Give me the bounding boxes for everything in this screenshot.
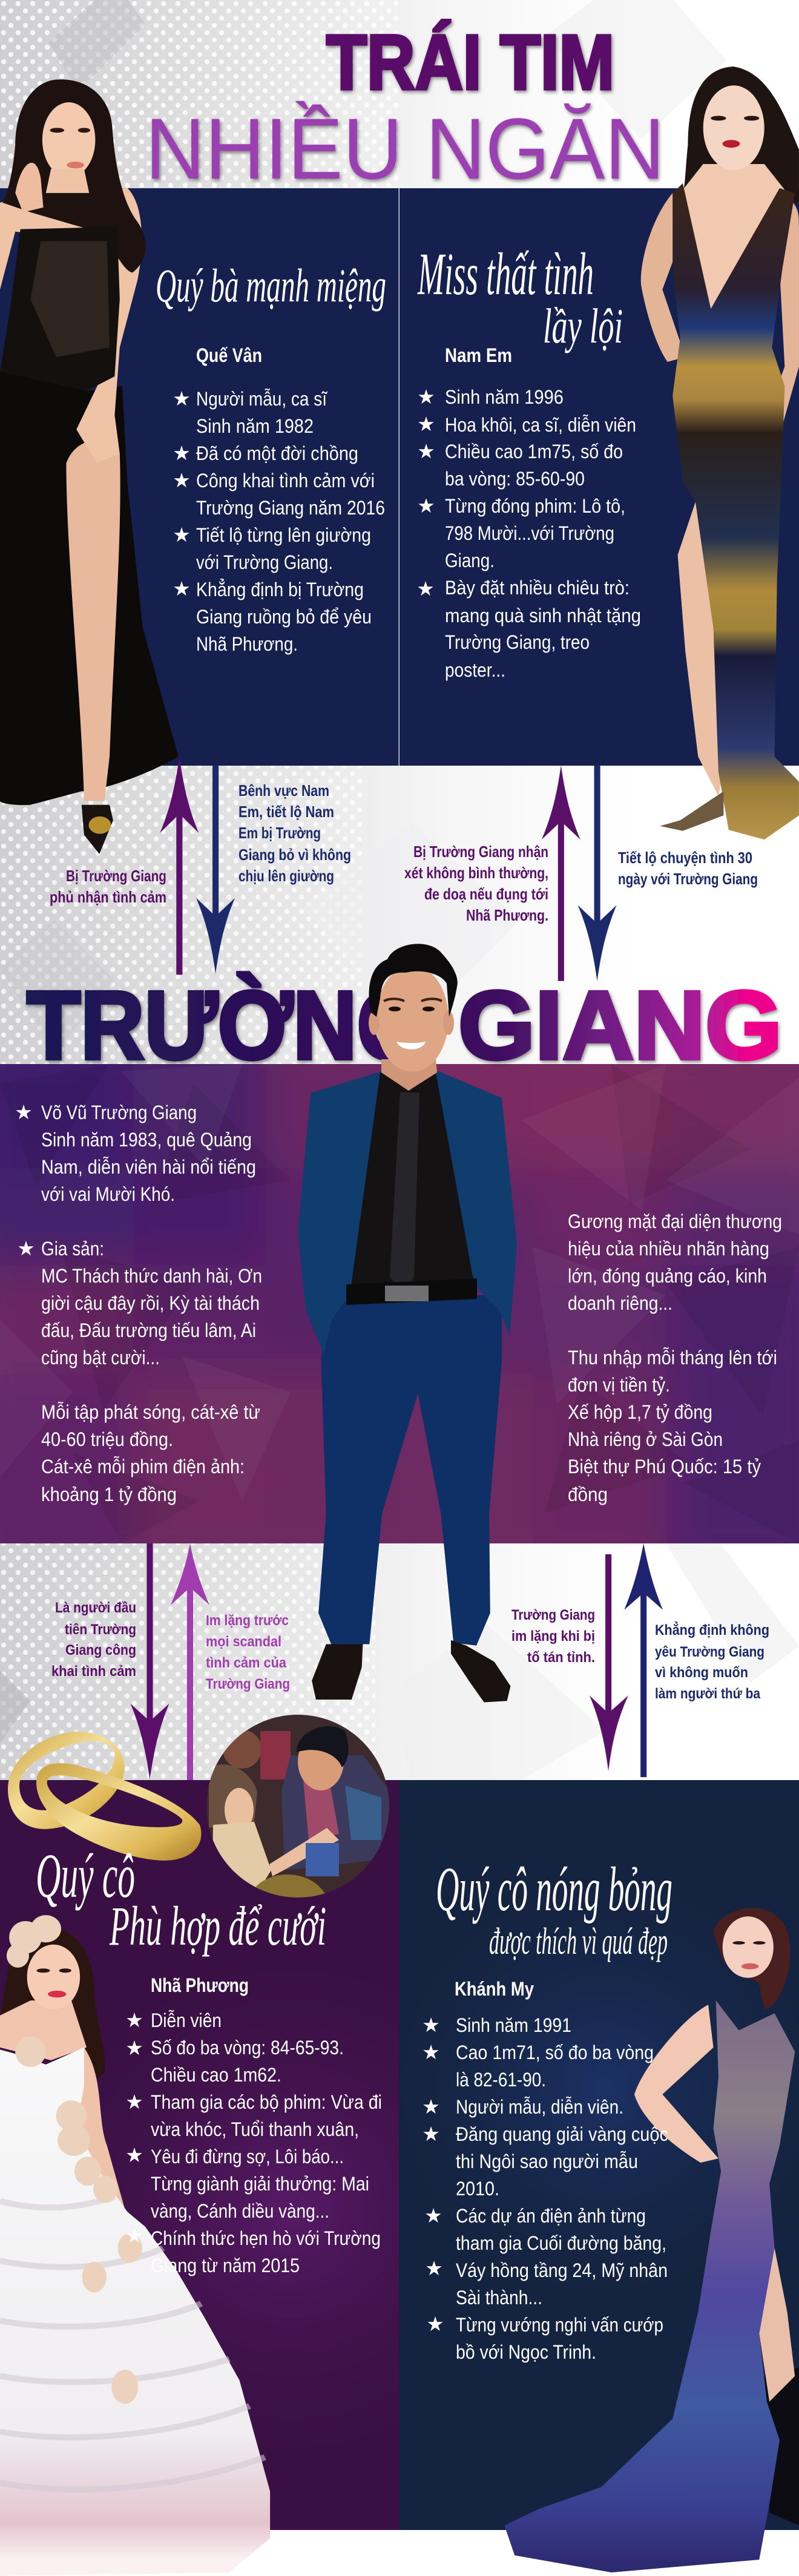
biography: đấu, Đấu trường tiếu lâm, Ai [41,1319,256,1341]
name: Nam Em [445,344,512,366]
bullet stars: ★ [424,2204,442,2227]
callout: bênh vực Nam Em: chịu lên giường [238,867,334,885]
bullet stars [173,387,191,600]
callout: nhận xét không bình thường: xét không bình thường, [404,864,548,882]
text block: Trường Giang right: Nhà riêng ở Sài Gòn [568,1428,723,1450]
callout: phủ nhận tình cảm: Bị Trường Giang [66,867,166,885]
callout: nhận xét không bình thường: Nhã Phương. [466,906,548,924]
title: Trường Giang [27,971,782,1079]
panel: Nam Em [400,188,799,766]
bullet list: 798 Mười...với Trường [445,522,614,544]
name: Quế Vân [196,344,262,366]
text block: Trường Giang right: Biệt thự Phú Quốc: 15 tỷ [568,1456,761,1477]
heading: Quý cô Phù hợp để cưới [36,1841,326,1957]
bullet list: Nhã Phương. [196,633,298,655]
bullet stars: ★ [125,2008,143,2032]
figure: Trường Giang [298,944,517,1702]
bullet list: với Trường Giang. [196,551,333,573]
bullet list: Tiết lộ từng lên giường [196,524,371,546]
bullet list: thi Ngôi sao người mẫu [456,2150,638,2172]
title [145,19,665,197]
callout: công khai tình cảm: khai tình cảm [51,1663,136,1680]
bullet list: Yêu đi đừng sợ, Lôi báo... [151,2146,344,2167]
bullet list: Chính thức hẹn hò với Trường [151,2227,381,2249]
bullet list: Giang từ năm 2015 [151,2255,300,2276]
callout: im lặng khi bị tố: im lặng khi bị [511,1628,595,1644]
callout: bênh vực Nam Em: Em, tiết lộ Nam [238,803,334,821]
callout: nhận xét không bình thường: Bị Trường Giang nhận [413,843,548,861]
bullet stars: ★ [422,2040,440,2064]
callout: im lặng trước scandal: Im lặng trước [206,1612,289,1629]
panel: Khánh My [399,1780,799,2530]
bullet list: vừa khóc, Tuổi thanh xuân, [151,2118,359,2140]
bullet stars [422,2013,444,2336]
bullet stars: ★ [426,2312,444,2336]
heading: Quý cô Phù hợp để cưới: Phù hợp để cưới [109,1895,326,1957]
bullet stars: ★ [173,577,191,600]
arrow: up to Nam Em [542,765,580,981]
icon: wedding rings [8,1732,201,1861]
bullet list [151,2009,382,2276]
biography: MC Thách thức danh hài, Ơn [41,1265,262,1287]
bullet list: Từng giành giải thưởng: Mai [151,2173,369,2195]
arrow: up from Nhã Phương [171,1543,209,1780]
bullet list [445,386,641,681]
callout: khẳng định không yêu: làm người thứ ba [655,1686,761,1702]
arrow: down from Nam Em [578,765,617,981]
biography: Võ Vũ Trường Giang [41,1102,197,1123]
bullet list: tham gia Cuối đường băng, [456,2232,666,2254]
callout: im lặng khi bị tố: tố tán tỉnh. [527,1649,595,1666]
text block: Trường Giang right: hiệu của nhiều nhãn hàng [568,1238,769,1260]
bullet list: Sinh năm 1982 [196,415,314,437]
biography: Gia sản: [41,1238,104,1260]
callout: công khai tình cảm: Giang công [65,1642,136,1658]
bullet stars: ★ [422,2095,440,2118]
panel: Nhã Phương [0,1780,399,2530]
background: top header [0,0,799,200]
bullet list: Người mẫu, ca sĩ [196,388,328,410]
text block: Trường Giang left [15,1100,262,1505]
bullet list: Người mẫu, diễn viên. [456,2096,623,2118]
bullet stars: ★ [173,441,191,465]
biography: khoảng 1 tỷ đồng [41,1484,177,1505]
bullet list: Giang. [445,550,495,571]
bullet list: Chiều cao 1m75, số đo [445,441,623,462]
bullet stars [416,385,435,600]
arrow: up from Khánh My [624,1543,663,1777]
text block: Trường Giang right: Xế hộp 1,7 tỷ đồng [568,1401,712,1423]
bullet list: vàng, Cánh diều vàng... [151,2200,329,2222]
bullet list: Sinh năm 1996 [445,386,564,408]
bullet list: Khẳng định bị Trường [196,579,364,600]
bullet list: Trường Giang, treo [445,631,590,653]
text block: Nam Em [416,240,641,681]
bullet stars: ★ [422,2122,440,2146]
bullet list: ba vòng: 85-60-90 [445,468,585,490]
bullet list: Diễn viên [151,2009,222,2031]
bullet stars: ★ [422,2013,440,2037]
callout: khẳng định không yêu: yêu Trường Giang [655,1644,764,1660]
bullet stars [15,1100,35,1260]
callout: chuyện tình 30 ngày: Tiết lộ chuyện tình 30 [618,849,752,867]
bullet list: Các dự án điện ảnh từng [456,2205,646,2227]
callout: im lặng trước scandal: mọi scandal [206,1634,281,1650]
bullet stars: ★ [125,2090,143,2114]
callout: phủ nhận tình cảm: phủ nhận tình cảm [50,888,166,906]
bullet list: Từng vướng nghi vấn cướp [456,2314,663,2336]
bullet list: bồ với Ngọc Trinh. [456,2341,596,2363]
bullet stars: ★ [416,577,435,600]
name: Khánh My [455,1978,534,2000]
biography: giời cậu đây rồi, Kỳ tài thách [41,1292,260,1314]
arrow: down to Nhã Phương [131,1543,169,1779]
photo: couple in crowd [206,1715,390,1898]
bullet list: 2010. [456,2178,499,2200]
callout: chuyện tình 30 ngày: ngày với Trường Giang [618,870,758,888]
callout: bênh vực Nam Em: Giang bỏ vì không [238,846,351,864]
bullet list: Hoa khôi, ca sĩ, diễn viên [445,414,636,436]
biography: Nam, diễn viên hài nổi tiếng [41,1156,256,1178]
bullet list: Bày đặt nhiều chiêu trò: [445,577,630,599]
heading: Miss thất tình lầy lội [417,240,623,353]
callout: phủ nhận tình cảm [50,867,166,906]
biography: cũng bật cười... [41,1347,160,1368]
bullet stars: ★ [417,412,435,436]
biography: với vai Mười Khó. [41,1183,175,1205]
panel: Trường Giang low-poly background [0,1064,799,1543]
text block: Trường Giang right: đơn vị tiền tỷ. [568,1374,670,1396]
figure: Nam Em [641,67,799,840]
bullet stars: ★ [173,523,191,547]
biography: Cát-xê mỗi phim điện ảnh: [41,1456,245,1477]
callout: chuyện tình 30 ngày [618,849,758,888]
heading: Quý cô Phù hợp để cưới: Quý cô [36,1841,135,1911]
heading: Quý cô nóng bỏng [436,1855,672,1962]
biography: Mỗi tập phát sóng, cát-xê từ [41,1401,260,1423]
bullet list: Trường Giang năm 2016 [196,497,385,519]
text block: Trường Giang right: Thu nhập mỗi tháng lên tới [568,1347,777,1368]
callout: im lặng khi bị tố: Trường Giang [511,1607,595,1623]
bullet list: Tham gia các bộ phim: Vừa đi [151,2091,382,2113]
figure: Khánh My [504,1908,799,2572]
figure: Nhã Phương [0,1915,270,2576]
callout: nhận xét không bình thường: đe doạ nếu đụng tới [424,885,548,903]
bullet list: Váy hồng tầng 24, Mỹ nhân [456,2259,668,2281]
bullet list: poster... [445,659,505,681]
callout: im lặng trước scandal: Trường Giang [206,1676,290,1692]
bullet stars: ★ [417,439,435,463]
background: arrows band 2 [0,1543,799,1780]
bullet stars: ★ [173,468,191,492]
bullet list: là 82-61-90. [456,2069,546,2091]
title: Trường Giang: TRƯỜNG [27,971,426,1079]
bullet list [196,388,385,655]
bullet list: Giang ruồng bỏ để yêu [196,606,372,628]
callout: khẳng định không yêu: Khẳng định không [655,1621,769,1638]
title line 1: TRÁI TIM [326,19,614,106]
bullet list: Chiều cao 1m62. [151,2064,281,2086]
callout: nhận xét không bình thường [404,843,548,924]
figure: Quế Vân [0,79,179,854]
heading: Quý bà mạnh miệng: Quý bà mạnh miệng [156,259,386,312]
bullet stars: ★ [17,1237,35,1260]
text block: Quế Vân [156,259,386,655]
text block: Khánh My [422,1855,672,2363]
text block: Trường Giang right: lớn, đóng quảng cáo, kinh [568,1265,767,1287]
text block: Trường Giang right: doanh riêng... [568,1292,672,1314]
heading: Miss thất tình lầy lội: lầy lội [543,298,623,353]
callout: công khai tình cảm: Là người đầu [55,1600,136,1616]
bullet list: Từng đóng phim: Lô tô, [445,495,625,517]
divider top [398,188,400,766]
callout: im lặng trước scandal: tình cảm của [206,1655,287,1671]
arrow: down from Quế Vân [196,765,235,974]
callout: khẳng định không yêu [655,1621,769,1702]
bullet list [456,2014,668,2363]
callout: bênh vực Nam Em [238,781,351,885]
biography: Sinh năm 1983, quê Quảng [41,1129,252,1151]
biography: 40-60 triệu đồng. [41,1428,173,1450]
bullet stars: ★ [15,1100,33,1124]
bullet stars: ★ [417,494,435,518]
bullet stars: ★ [425,2256,443,2280]
callout: công khai tình cảm [51,1600,136,1680]
callout: im lặng khi bị tố [511,1607,595,1666]
callout: im lặng trước scandal [206,1612,290,1692]
bullet list: Sinh năm 1991 [456,2014,571,2036]
text block: Trường Giang right [568,1211,782,1505]
heading: Miss thất tình lầy lội: Miss thất tình [417,240,594,307]
callout: bênh vực Nam Em: Bênh vực Nam [238,781,329,800]
name: Nhã Phương [151,1974,249,1996]
text block: Trường Giang right: đồng [568,1484,608,1505]
bullet list: Công khai tình cảm với [196,470,375,491]
title line 2: NHIỀU NGĂN [145,101,665,197]
text block: Nhã Phương [36,1841,382,2276]
bullet stars: ★ [125,2224,143,2247]
biography [41,1102,262,1505]
bullet stars: ★ [417,385,435,409]
callout: công khai tình cảm: tiên Trường [65,1622,136,1638]
bullet list: mang quà sinh nhật tặng [445,605,641,626]
arrow: down to Khánh My [590,1554,628,1771]
bullet stars [125,2008,143,2247]
panel: Quế Vân [0,188,399,766]
bullet list: Số đo ba vòng: 84-65-93. [151,2037,344,2058]
title: Trường Giang: GIANG [458,971,782,1079]
bullet list: Sài thành... [456,2287,542,2308]
callout: khẳng định không yêu: vì không muốn [655,1664,748,1681]
arrow: up from Trường Giang to Quế Vân [160,757,199,974]
bullet stars: ★ [125,2143,143,2167]
bullet list: Cao 1m71, số đo ba vòng [456,2042,654,2063]
bullet stars: ★ [173,387,191,410]
callout: bênh vực Nam Em: Em bị Trường [238,824,321,842]
background: arrows band 1 [0,766,799,1064]
bullet list: Đã có một đời chồng [196,442,358,464]
bullet list: Đăng quang giải vàng cuộc [456,2123,668,2145]
bullet stars: ★ [125,2036,143,2060]
